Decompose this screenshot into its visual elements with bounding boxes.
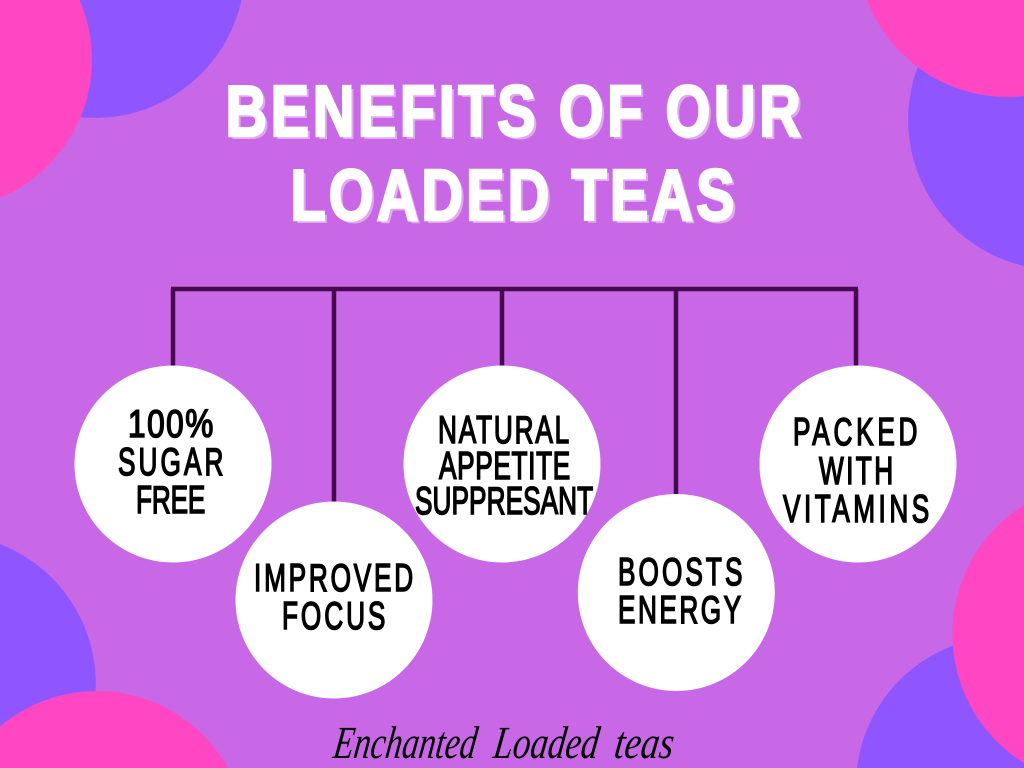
brand signature	[330, 717, 678, 768]
connector lines	[171, 289, 858, 506]
benefit: improved focus	[236, 502, 432, 698]
benefit: improved focus: IMPROVED	[254, 556, 413, 599]
benefit: boosts energy: BOOSTS	[618, 550, 742, 593]
decoration: top-left circles	[0, 0, 242, 198]
brand signature: Enchanted	[330, 717, 481, 768]
decoration: bottom-left circles	[0, 544, 228, 768]
title: BENEFITS OF OUR	[228, 74, 804, 154]
benefit: 100% sugar free: FREE	[136, 478, 205, 521]
brand signature: teas	[612, 717, 678, 768]
title: BENEFITS OF OUR	[226, 71, 801, 151]
benefit: packed with vitamins: PACKED	[793, 410, 917, 453]
benefit: natural appetite suppresant: APPETITE	[439, 444, 570, 487]
benefit: 100% sugar free: 100%	[128, 403, 213, 446]
benefit: natural appetite suppresant	[404, 366, 600, 562]
benefit: 100% sugar free: SUGAR	[118, 440, 223, 483]
benefit: boosts energy	[578, 494, 775, 691]
benefit: boosts energy: ENERGY	[618, 588, 741, 631]
benefit: packed with vitamins	[760, 366, 956, 562]
benefit: packed with vitamins: VITAMINS	[783, 487, 929, 530]
benefit: 100% sugar free	[74, 366, 272, 562]
decoration: bottom-right circles	[857, 505, 1024, 768]
benefit: natural appetite suppresant: SUPPRESANT	[415, 479, 593, 522]
benefit: packed with vitamins: WITH	[819, 449, 893, 492]
title: LOADED TEAS	[294, 158, 738, 238]
decoration: top-right circles	[867, 0, 1024, 266]
benefit: improved focus: FOCUS	[282, 594, 385, 637]
title: LOADED TEAS	[290, 155, 735, 235]
benefit: natural appetite suppresant: NATURAL	[438, 408, 569, 451]
title	[226, 71, 804, 238]
brand signature: Loaded	[490, 717, 603, 768]
